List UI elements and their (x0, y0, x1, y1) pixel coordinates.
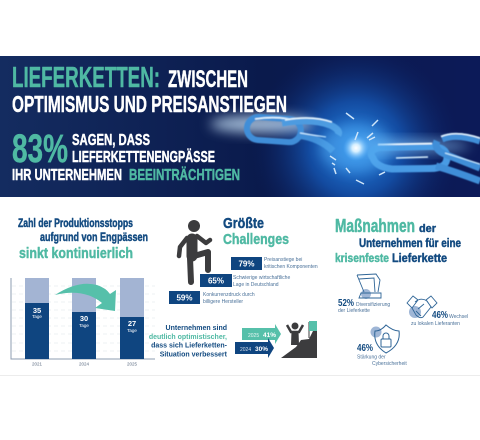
bar: 65% (200, 274, 290, 288)
statistic: 83% (12, 127, 240, 184)
heading: challenges: Größte (223, 215, 264, 232)
arrows: 2025 and 2024: 2025 (248, 333, 259, 339)
text: optimism: Unternehmen sind (166, 325, 227, 332)
icon: summit with flag (281, 321, 317, 358)
heading: production stops: sinkt kontinuierlich (19, 245, 133, 262)
bar: 65%: 65% (208, 276, 224, 286)
heading: measures: der (419, 223, 437, 235)
measure: cyber security: Stärkung der (357, 354, 386, 360)
bar: 79%: kritischen Komponenten (264, 264, 318, 270)
bar chart: Tage (32, 314, 42, 319)
banner (0, 56, 480, 197)
measure: local suppliers: zu lokalen Lieferanten (411, 321, 460, 327)
arrows: 2025 and 2024: 2024 (240, 347, 251, 353)
heading: measures: Lieferkette (392, 253, 447, 265)
bar: 79% (231, 257, 318, 270)
icon: robot arm (357, 274, 381, 299)
panel: challenges (149, 215, 318, 358)
measure: cyber security: Cybersicherheit (372, 361, 407, 367)
text: optimism: dass sich Lieferketten- (151, 342, 228, 350)
chain illustration (246, 116, 480, 181)
icon: handshake (407, 296, 437, 318)
measure: diversification (338, 298, 390, 314)
heading: measures (335, 216, 461, 265)
headline: OPTIMISMUS UND PREISANSTIEGEN (12, 91, 287, 117)
heading: production stops: Zahl der Produktionsstopps (18, 218, 133, 230)
arrows: 2025 and 2024 (235, 324, 281, 358)
panel: production stops (11, 218, 155, 366)
measure: diversification: 52% (338, 298, 354, 309)
bar chart: 2024 (79, 362, 90, 366)
heading: measures: Unternehmen für eine (359, 238, 461, 250)
heading: challenges: Challenges (223, 231, 289, 248)
text: optimism (149, 325, 228, 358)
arrow: declining trend (55, 284, 116, 311)
bar: 59%: Konkurrenzdruck durch (203, 292, 255, 298)
bar chart: 2021 (32, 362, 43, 366)
text: optimism: Situation verbessert (160, 352, 228, 358)
bar: 65%: Schwierige wirtschaftliche (233, 275, 290, 281)
statistic: 83%: SAGEN, DASS (72, 132, 150, 149)
statistic: 83%: 83% (12, 127, 68, 171)
heading: production stops (18, 218, 148, 262)
measure: local suppliers: Wechsel (449, 314, 468, 320)
heading: measures: krisenfeste (335, 253, 389, 265)
bar chart: 30 (80, 314, 88, 323)
panel: measures (335, 216, 468, 367)
bar: 65%: Lage in Deutschland (233, 282, 279, 288)
icon: climbing person (179, 220, 210, 282)
bar: 59%: billigere Hersteller (203, 299, 243, 305)
bar chart: 35 (33, 306, 41, 315)
measure: local suppliers: 46% (432, 310, 448, 321)
bar: 59% (169, 291, 255, 305)
bar chart: Tage (127, 328, 137, 333)
icon: shield (370, 325, 399, 353)
text: optimism: deutlich optimistischer, (149, 334, 227, 341)
arrows: 2025 and 2024: 30% (255, 346, 268, 353)
bar chart (11, 278, 155, 366)
bar chart: 27 (128, 319, 136, 328)
statistic: 83%: BEEINTRÄCHTIGEN (129, 167, 240, 184)
headline: ZWISCHEN (168, 66, 248, 93)
bar chart: Tage (79, 323, 89, 328)
bar: 79%: 79% (238, 260, 255, 268)
measure: cyber security: 46% (357, 343, 373, 354)
statistic: 83%: IHR UNTERNEHMEN (12, 167, 122, 184)
bar: 79%: Preisanstiege bei (264, 257, 302, 263)
measure: diversification: der Lieferkette (338, 308, 370, 314)
headline (12, 62, 287, 117)
heading: challenges (223, 215, 289, 248)
measure: local suppliers (411, 310, 468, 327)
bar: 59%: 59% (176, 294, 193, 302)
statistic: 83%: LIEFERKETTENENGPÄSSE (72, 149, 215, 166)
arrows: 2025 and 2024: 41% (263, 332, 276, 339)
measure: cyber security (357, 343, 407, 367)
bar chart: 2025 (127, 362, 138, 366)
heading: measures: Maßnahmen (335, 216, 415, 236)
chain shards (330, 113, 385, 184)
heading: production stops: aufgrund von Engpässen (40, 232, 148, 244)
measure: diversification: Diversifizierung (356, 302, 390, 308)
headline: LIEFERKETTEN: (12, 62, 160, 94)
